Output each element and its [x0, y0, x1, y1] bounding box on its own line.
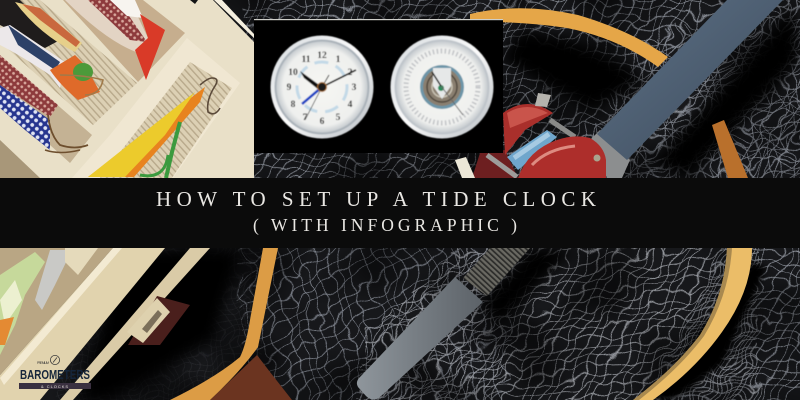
wood fragment behind rod	[712, 120, 748, 178]
tide clock: 9	[287, 83, 292, 93]
tide clock: 11	[302, 55, 311, 65]
fishing rod: upper grip	[590, 0, 783, 178]
tide clock: 4	[348, 100, 353, 110]
wooden net hoop: top arc	[470, 8, 668, 67]
panel: tackle box, upper	[0, 0, 254, 178]
compartment: yellow lure	[72, 38, 240, 178]
logo word: and clocks: & CLOCKS	[41, 384, 68, 389]
subtitle text: ( WITH INFOGRAPHIC )	[253, 215, 517, 235]
tide clock: 10	[288, 68, 298, 78]
compartment: red and blue lures	[0, 55, 92, 163]
logo: Barometers & Clocks	[19, 355, 91, 389]
tide clock: 2	[348, 68, 353, 78]
title text: HOW TO SET UP A TIDE CLOCK	[156, 187, 596, 211]
logo word: barometers: BAROMETERS	[20, 367, 90, 382]
logo icon: compass	[50, 355, 60, 365]
wooden net hoop: lower left	[170, 248, 278, 400]
tide clock: 6	[320, 117, 325, 127]
logo word: premium: PREMIUM	[37, 361, 49, 365]
wood handle	[210, 355, 292, 400]
panel: clock photo	[254, 19, 503, 153]
title band	[0, 178, 800, 248]
fishing rod: lower grip	[357, 277, 483, 400]
compartment: gold and red lures	[0, 0, 137, 125]
tide clock: 8	[291, 100, 296, 110]
tide clock: 7	[303, 113, 308, 123]
tide clock: 5	[336, 113, 341, 123]
tide clock: 12	[317, 51, 327, 61]
latch	[127, 296, 190, 345]
panel: tackle box, lower	[0, 248, 210, 400]
compartment: top lure	[63, 0, 185, 82]
tide clock	[270, 36, 374, 138]
tide clock: 1	[336, 55, 341, 65]
compartment: small corner	[0, 140, 40, 178]
tide clock: 3	[352, 83, 357, 93]
barometer	[390, 36, 494, 138]
fishing reel	[455, 93, 606, 178]
fishing rod: lower threaded section	[463, 248, 530, 296]
logo ribbon	[19, 383, 91, 389]
wooden net hoop: lower right	[633, 248, 752, 400]
